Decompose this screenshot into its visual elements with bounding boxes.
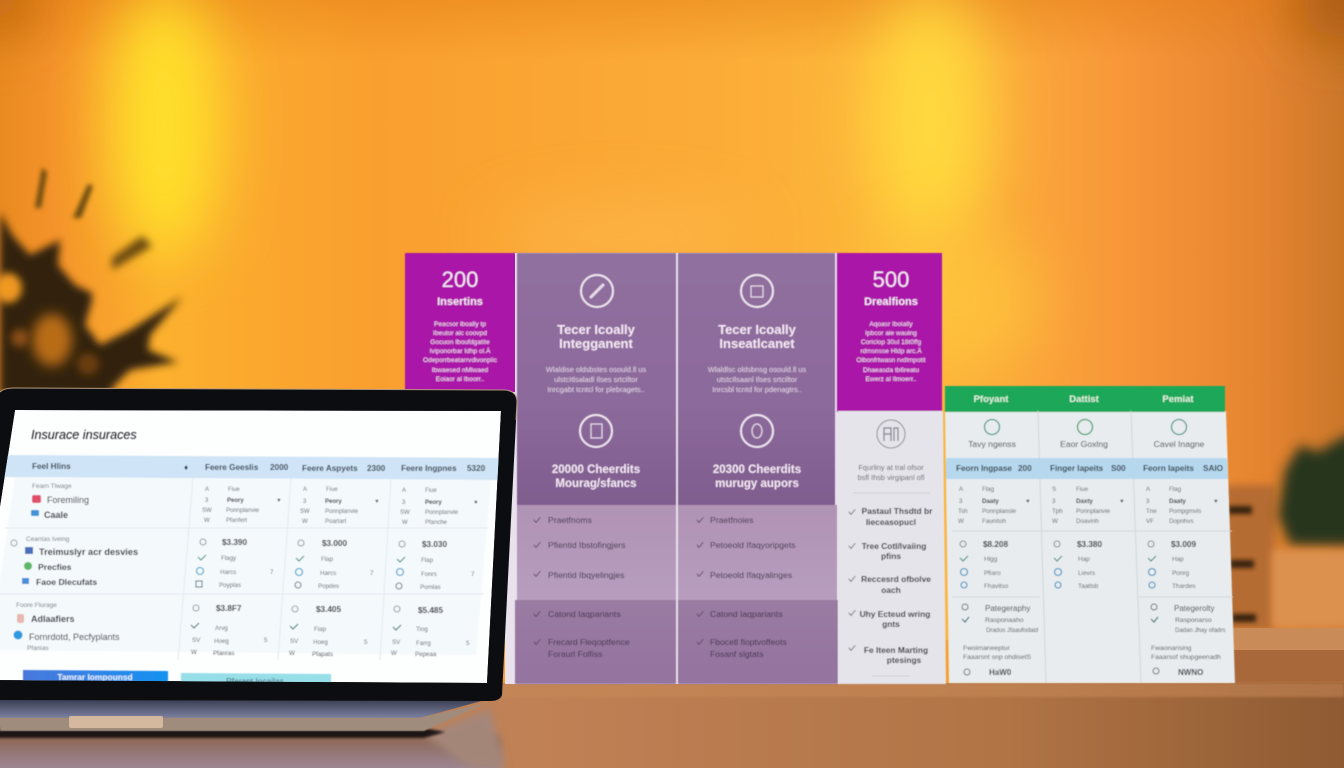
row two labels: Ceantas Iveing bbox=[26, 536, 70, 543]
description bbox=[708, 365, 806, 394]
feature rows: Flag bbox=[1169, 486, 1182, 493]
action button: secondary: Pfarant Iocailas bbox=[226, 676, 284, 686]
feature rows: A bbox=[959, 486, 964, 493]
screen title: Insurace insuraces bbox=[31, 428, 137, 442]
plan column prices row two: 7 bbox=[471, 571, 475, 578]
heading: feature two: 20000 Cheerdits bbox=[552, 464, 640, 476]
column headers: Pfoyant bbox=[974, 394, 1009, 405]
plan column prices row two: Harcs bbox=[220, 569, 236, 576]
plan column prices row three: $5.485 bbox=[418, 606, 443, 615]
feature rows: ♥ bbox=[1120, 498, 1124, 505]
plan column prices row three: W bbox=[191, 649, 197, 656]
plan column prices row three: Pfapats bbox=[312, 651, 333, 658]
extras column one: Rasponaaho bbox=[985, 617, 1024, 624]
laptop bezel bbox=[0, 388, 517, 701]
benefits list: Pfientid Ibqyelingjes bbox=[548, 570, 624, 580]
row one icons bbox=[31, 495, 41, 516]
column labels: Cavel Inagne bbox=[1154, 439, 1205, 449]
pricing rows: Hap bbox=[1172, 556, 1184, 563]
benefits list: ptesings bbox=[887, 655, 922, 665]
feature rows: Daaty bbox=[1169, 498, 1186, 505]
plan column feature rows: Pfanche bbox=[425, 520, 448, 526]
row three labels: Pfanias bbox=[27, 645, 49, 652]
benefits list: Praetfnoms bbox=[548, 515, 592, 525]
plan column prices row three: Arvg bbox=[215, 625, 228, 632]
heading: feature one: Inseatlcanet bbox=[719, 336, 795, 351]
check marks bbox=[534, 518, 540, 644]
price band labels bbox=[956, 464, 1224, 473]
plan column prices row two: Popdes bbox=[318, 583, 339, 590]
plan column feature rows: A bbox=[205, 487, 209, 493]
plan column prices row three bbox=[191, 604, 470, 658]
extras column three: Fwaonarising bbox=[1151, 645, 1192, 652]
row one labels: Fearn Tlwage bbox=[32, 483, 72, 490]
pricing rows: Fhavitso bbox=[984, 583, 1009, 590]
plan column prices row three: Pepeaa bbox=[415, 651, 437, 658]
laptop rim highlight bbox=[0, 388, 517, 420]
row two labels: Precfies bbox=[38, 562, 72, 572]
description: Wlaldlsc oldsbnsg osould.ll us bbox=[708, 365, 806, 374]
benefits list: Petoeold Ifaqyalinges bbox=[710, 570, 792, 580]
plan column prices row two: 7 bbox=[370, 570, 374, 577]
laptop base top bbox=[0, 698, 492, 718]
laptop shadow bbox=[0, 728, 445, 738]
action button: primary: Tamrar Iompounsd bbox=[57, 672, 133, 682]
heading: feature one: Integganent bbox=[559, 336, 633, 351]
description text: Ipbcor aie wauing bbox=[865, 330, 917, 337]
benefits list: gnts bbox=[882, 619, 900, 629]
plan column prices row three: W bbox=[391, 650, 397, 657]
heading: feature two bbox=[552, 464, 640, 490]
benefits list bbox=[548, 515, 630, 659]
feature rows: Fiue bbox=[1076, 486, 1089, 493]
benefits list: Foraurl Folfiss bbox=[548, 649, 602, 659]
plan column prices row three: $3.8F7 bbox=[216, 604, 242, 613]
description text: Dhaeasda tb6reatu bbox=[863, 367, 919, 374]
feature rows: Tsh bbox=[958, 508, 968, 515]
plan column feature rows: A bbox=[402, 488, 406, 494]
benefits list: Fbocetl fioptvoffeots bbox=[710, 637, 787, 647]
feature rows: Dopnhvs bbox=[1169, 518, 1193, 525]
plan column prices row three: SV bbox=[290, 638, 299, 645]
header labels: 2000 bbox=[270, 463, 289, 472]
heading: feature two bbox=[713, 464, 801, 490]
plan column prices row three: $3.405 bbox=[316, 605, 341, 614]
pricing rows: $8.208 bbox=[983, 540, 1008, 549]
benefits list: Fosanf slgtats bbox=[710, 649, 764, 659]
plan column feature rows: Poartart bbox=[325, 519, 347, 525]
feature rows: VF bbox=[1146, 518, 1154, 525]
column labels bbox=[968, 439, 1205, 449]
price band labels: Finger Iapeits bbox=[1050, 464, 1104, 473]
feature rows: Tph bbox=[1052, 508, 1063, 515]
description text bbox=[856, 321, 926, 383]
description text: Ibwaesed nMlwaed bbox=[432, 367, 489, 374]
row three labels: Adlaafiers bbox=[31, 614, 75, 624]
price band labels: Feorn Ingpase bbox=[956, 464, 1012, 473]
pricing rows bbox=[983, 540, 1196, 590]
feature rows: Doavinh bbox=[1076, 518, 1099, 525]
feature rows: Ponnplansle bbox=[982, 508, 1017, 515]
feature rows: 3 bbox=[959, 498, 963, 505]
feature rows: 3 bbox=[1146, 498, 1150, 505]
row one labels: Foremiling bbox=[47, 495, 89, 505]
column labels: Eaor Goxlng bbox=[1060, 439, 1108, 449]
row one labels bbox=[32, 483, 89, 520]
blurred plant, left bbox=[0, 168, 182, 395]
column labels: Tavy ngenss bbox=[968, 439, 1016, 449]
plan column feature rows: Ponnplanvie bbox=[425, 510, 459, 516]
heading: feature two: 20300 Cheerdits bbox=[713, 464, 801, 476]
header labels: Feel Hlins bbox=[32, 462, 71, 471]
plan column prices row three: 5 bbox=[466, 640, 470, 647]
plan column feature rows: 3 bbox=[303, 499, 307, 505]
plan column prices row two: $3.000 bbox=[322, 539, 347, 548]
plan column prices row three: SV bbox=[392, 639, 401, 646]
plan column feature rows: Peory bbox=[227, 498, 244, 504]
plan column prices row three: SV bbox=[192, 637, 201, 644]
heading: feature two: Mourag/sfancs bbox=[555, 478, 637, 490]
icon: bar chart bbox=[877, 420, 905, 448]
description text: Gocuon Iboufdgatite bbox=[430, 339, 490, 346]
plan column prices row three: Pfanras bbox=[213, 650, 234, 657]
heading: feature one bbox=[718, 322, 797, 351]
description text bbox=[423, 321, 498, 383]
plan column feature rows: Peory bbox=[325, 499, 342, 505]
plan column prices row two bbox=[219, 538, 475, 591]
description: Wlaldise oldsbstes osould.ll us bbox=[546, 365, 646, 374]
extras column three: Dadan Jhay ofadrs bbox=[1175, 628, 1225, 634]
plan column prices row three: Fiap bbox=[314, 626, 327, 633]
benefits list: Reccesrd ofbolve bbox=[861, 574, 931, 584]
plan column prices row two: 7 bbox=[270, 569, 274, 576]
benefits list: oach bbox=[881, 585, 901, 595]
plan column prices row two: $3.030 bbox=[422, 540, 447, 549]
plan column prices row three: Hoeg bbox=[313, 639, 328, 646]
feature rows: W bbox=[1052, 518, 1058, 525]
extras column one: Pategeraphy bbox=[985, 604, 1030, 613]
plan column feature rows: Ponnplanvie bbox=[325, 509, 359, 515]
benefits list: Pastaul Thsdtd br bbox=[862, 506, 933, 516]
header labels: Feere Ingpnes bbox=[401, 464, 457, 473]
description: Inrcsbl tcntd for pdenagtrs.. bbox=[712, 385, 802, 394]
icon: calendar box bbox=[741, 275, 773, 307]
plan column prices row three: W bbox=[289, 650, 295, 657]
row three labels: Fornrdotd, Pecfyplants bbox=[29, 632, 120, 642]
intro text: Fqurliny at tral ofsor bbox=[858, 463, 924, 472]
price band bbox=[946, 458, 1228, 479]
description: ulstcItlsaladl Ilses srtcIltor bbox=[554, 375, 638, 384]
plan column feature rows: ♥ bbox=[277, 498, 281, 504]
pricing rows: Ponrg bbox=[1172, 570, 1189, 577]
extras column three: Rasponarso bbox=[1175, 617, 1212, 624]
description: utstcIlsaanl Ilses srtcIltor bbox=[717, 375, 798, 384]
check marks bbox=[697, 518, 703, 644]
blurred potted plant, right bbox=[1272, 430, 1344, 628]
laptop base front bbox=[0, 703, 486, 731]
feature rows: ♥ bbox=[1026, 498, 1030, 505]
price band labels: 200 bbox=[1018, 464, 1032, 473]
description text: Ewerz al Ilmoerr.. bbox=[866, 376, 917, 383]
plan column feature rows: Fiue bbox=[326, 487, 338, 493]
heading: feature two: murugy aupors bbox=[715, 478, 799, 490]
check marks bbox=[849, 510, 855, 650]
benefits list: Praetfnoies bbox=[710, 515, 753, 525]
plan column prices row two: Flap bbox=[321, 556, 334, 563]
row three labels bbox=[16, 602, 120, 652]
pricing rows: $3.009 bbox=[1171, 540, 1196, 549]
pricing rows: $3.380 bbox=[1077, 540, 1102, 549]
feature rows: Ponnplanvie bbox=[1076, 508, 1111, 515]
laptop bbox=[0, 388, 517, 738]
pricing rows: Hlgg bbox=[984, 556, 998, 563]
description bbox=[546, 365, 646, 394]
row two labels bbox=[26, 536, 138, 587]
header band bbox=[0, 455, 500, 480]
plan column icons row two bbox=[196, 539, 405, 589]
plan column feature rows: W bbox=[302, 519, 308, 525]
column headers: Pemiat bbox=[1162, 394, 1194, 405]
extras column three: Faaarsof shupgeenadh bbox=[1151, 654, 1221, 661]
extras column one: Fwoimaneeptur bbox=[963, 645, 1011, 652]
extras column one bbox=[963, 604, 1038, 677]
wooden table bbox=[0, 628, 1344, 768]
extras column three: Pategerolty bbox=[1174, 604, 1214, 613]
price band labels: SAIO bbox=[1203, 464, 1224, 473]
plan column prices row three: 5 bbox=[364, 639, 368, 646]
column headers: Dattist bbox=[1069, 394, 1100, 405]
row two labels: Treimuslyr acr desvies bbox=[39, 547, 138, 557]
action button: primary bbox=[22, 669, 169, 682]
row three icons bbox=[14, 614, 24, 640]
benefits list: Catond Iaqpariants bbox=[548, 609, 621, 619]
description text: Ibeutor aic coovpd bbox=[433, 330, 487, 337]
icon: clipboard bbox=[580, 415, 612, 447]
feature rows: ♥ bbox=[1214, 498, 1218, 505]
action button: secondary bbox=[180, 672, 332, 682]
benefits list bbox=[860, 506, 933, 665]
plan column feature rows: Fiue bbox=[228, 487, 240, 493]
benefits list: Iieceasopucl bbox=[866, 517, 916, 527]
column icons bbox=[984, 420, 1186, 434]
panel: white backing strip bbox=[505, 253, 839, 684]
extras column three bbox=[1151, 604, 1225, 677]
panel: left magenta plan bbox=[405, 253, 516, 393]
extras column one: HaW0 bbox=[989, 668, 1012, 677]
plan column prices row two: Fonrs bbox=[421, 571, 437, 578]
plan column prices row three: 5 bbox=[264, 637, 268, 644]
heading: feature one: Tecer Icoally bbox=[557, 322, 636, 337]
benefits list: Fe Iteen Marting bbox=[864, 645, 928, 655]
plan column feature rows: Ponnplanvie bbox=[226, 508, 260, 514]
description text: Oibonfrtwasn rvdlmpotit bbox=[856, 357, 926, 364]
panel: green three-column plan card bbox=[945, 386, 1235, 683]
feature rows: 3 bbox=[1052, 498, 1056, 505]
benefits list: Catond Iaqpariants bbox=[710, 609, 783, 619]
plan column prices row two: $3.390 bbox=[222, 538, 247, 547]
feature rows: Flag bbox=[982, 486, 995, 493]
benefits list: Tree Cotl/Ivaiing bbox=[862, 541, 926, 551]
extras column one: Faaarsnt snp ohdisetS bbox=[963, 654, 1031, 661]
header labels: 5320 bbox=[467, 464, 486, 473]
plan column feature rows bbox=[202, 487, 478, 526]
benefits list: pfins bbox=[881, 551, 901, 561]
plan column prices row two: Poyplas bbox=[219, 582, 241, 589]
description text: Peacsor iboally tp bbox=[434, 321, 486, 328]
heading: Insertins: Insertins bbox=[437, 296, 483, 308]
laptop screen bbox=[0, 410, 501, 690]
header labels: ♦ bbox=[184, 463, 188, 472]
value: 200: 200 bbox=[442, 267, 478, 292]
extras column three: NWNO bbox=[1178, 668, 1203, 677]
plan column feature rows: ♥ bbox=[375, 499, 379, 505]
feature rows bbox=[958, 486, 1218, 525]
benefits list: Pfientid Ibstofingjers bbox=[548, 540, 625, 550]
price band labels: S00 bbox=[1111, 464, 1126, 473]
blurred shelf, right bbox=[1225, 485, 1275, 630]
description text: Odeporrbeatarrvdivonplic bbox=[423, 357, 498, 364]
plan column feature rows: 3 bbox=[402, 500, 406, 506]
header labels: 2300 bbox=[367, 464, 386, 473]
pricing rows: Taatlsb bbox=[1078, 583, 1099, 590]
panel: purple plan two bbox=[678, 253, 838, 684]
description text: Iviponorbar Idhp ol.Ä bbox=[430, 347, 491, 355]
row one labels: Caale bbox=[44, 510, 68, 520]
plan column prices row two: Flap bbox=[421, 557, 434, 564]
trackpad notch bbox=[69, 716, 163, 728]
plan column feature rows: W bbox=[402, 520, 408, 526]
feature rows: Daaty bbox=[982, 498, 999, 505]
pricing rows: Pfiaro bbox=[984, 570, 1001, 577]
plan column prices row three: Tiog bbox=[416, 626, 428, 633]
plan column feature rows: SW bbox=[300, 509, 310, 515]
description text: Eoiaor al Iboorr.. bbox=[436, 376, 484, 383]
pricing rows: Hap bbox=[1078, 556, 1090, 563]
body tint bbox=[0, 477, 491, 655]
extras column one: Dradus Jfaaufodaid bbox=[986, 628, 1038, 634]
plan column prices row three: Farrg bbox=[416, 640, 431, 647]
plan column feature rows: Pfanfert bbox=[226, 518, 247, 524]
plan column icons row three bbox=[191, 605, 401, 630]
plan column feature rows: 3 bbox=[205, 498, 209, 504]
plan column feature rows: A bbox=[303, 487, 307, 493]
row three labels: Foore Flurage bbox=[16, 602, 57, 609]
pricing rows: Thardes bbox=[1172, 583, 1195, 590]
intro text bbox=[858, 463, 925, 482]
plan column feature rows: Fiue bbox=[425, 488, 437, 494]
panel: purple plan one bbox=[515, 253, 676, 684]
row two labels: Faoe Dlecufats bbox=[36, 577, 97, 587]
icon: tag bbox=[741, 415, 773, 447]
description text: Coriclop 30ul 18t0ffg bbox=[861, 339, 922, 346]
panel: right magenta and white plan bbox=[837, 253, 946, 684]
description text: rdmsnsse Hldp arc.Ä bbox=[860, 347, 922, 355]
icon: wrench bbox=[581, 275, 613, 307]
feature rows: S bbox=[1052, 486, 1056, 493]
benefits list: Frecard Fleqoptfence bbox=[548, 637, 630, 647]
plan column prices row three: Hoeg bbox=[214, 638, 229, 645]
extras icons bbox=[962, 604, 1159, 675]
row two icons bbox=[11, 540, 33, 584]
benefits list bbox=[710, 515, 796, 659]
feature rows: Daxty bbox=[1076, 498, 1093, 505]
description: Inrcgabt tcntcl for plebragets.. bbox=[547, 385, 645, 394]
pricing row icons bbox=[960, 541, 1156, 588]
feature rows: Tne bbox=[1146, 508, 1157, 515]
header labels: Feere Aspyets bbox=[302, 464, 358, 473]
plan column feature rows: SW bbox=[400, 510, 410, 516]
feature rows: A bbox=[1146, 486, 1151, 493]
benefits list: Uhy Ecteud wring bbox=[860, 609, 930, 619]
description text: Aqoasr Iboially bbox=[869, 321, 913, 328]
plan column feature rows: ♥ bbox=[474, 500, 478, 506]
header labels: Feere Geeslis bbox=[205, 463, 259, 472]
header labels bbox=[32, 462, 486, 473]
feature rows: Pompgmvls bbox=[1169, 508, 1201, 515]
value: 500: 500 bbox=[873, 267, 909, 292]
plan column feature rows: Peory bbox=[425, 500, 442, 506]
plan column prices row two: Harcs bbox=[320, 570, 336, 577]
plan column prices row two: Flagy bbox=[221, 555, 237, 562]
heading: feature one: Tecer Icoally bbox=[718, 322, 797, 337]
feature rows: Faunitoh bbox=[982, 518, 1007, 525]
feature rows: W bbox=[958, 518, 964, 525]
intro text: bsfl Ihsb virgipanl ofl bbox=[858, 473, 925, 482]
heading: Drealfions: Drealfions bbox=[864, 296, 918, 308]
price band labels: Feorn Iapeits bbox=[1143, 464, 1194, 473]
plan column feature rows: SW bbox=[202, 508, 212, 514]
benefits list: Petoeold Ifaqyoripgets bbox=[710, 540, 796, 550]
pricing rows: Lievrs bbox=[1078, 570, 1095, 577]
plan column feature rows: W bbox=[204, 518, 210, 524]
heading: feature one bbox=[557, 322, 636, 351]
plan column prices row two: Pomlas bbox=[420, 584, 441, 591]
column headers bbox=[974, 394, 1194, 405]
